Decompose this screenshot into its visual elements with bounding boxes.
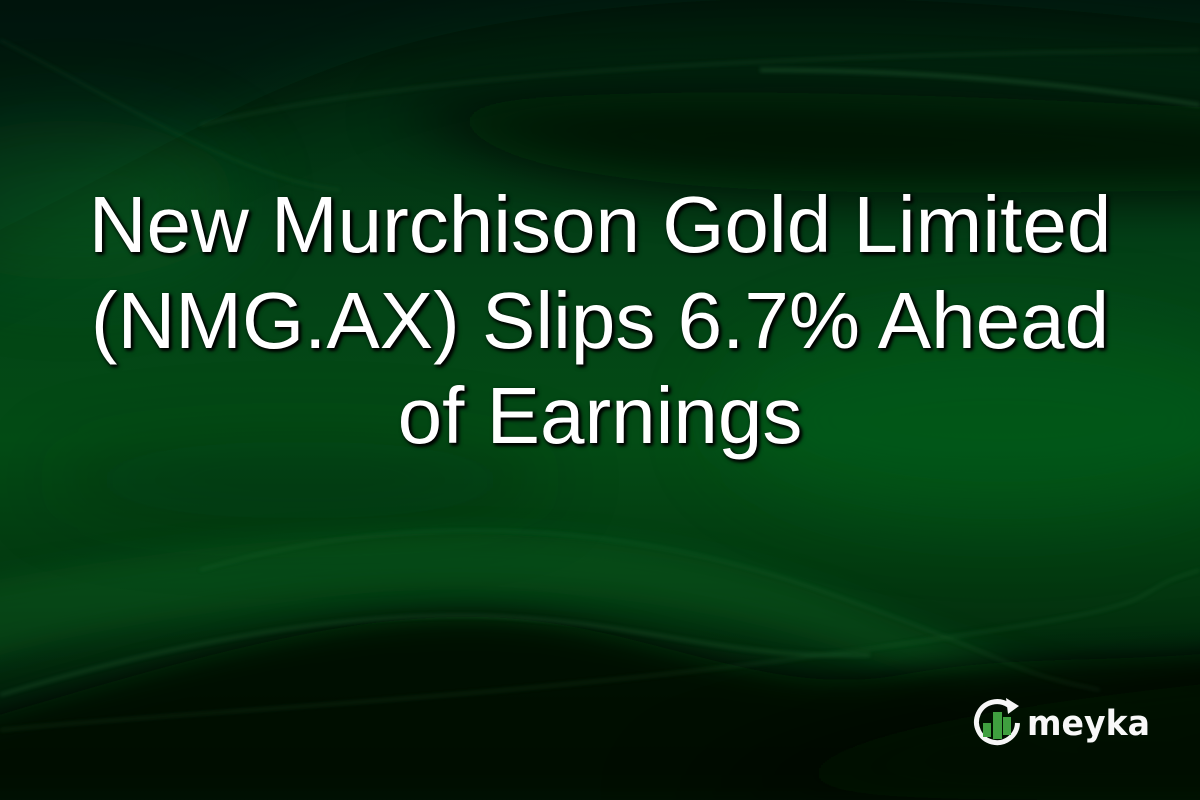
title: [89, 180, 1111, 464]
title: (NMG.AX) Slips 6.7% Ahead: [91, 276, 1109, 364]
title: of Earnings: [398, 371, 802, 460]
wordmark: meyka: [1027, 704, 1150, 744]
logo: meyka: [974, 698, 1150, 746]
icon: circular arrow with green bars: [977, 698, 1019, 743]
title: New Murchison Gold Limited: [89, 180, 1111, 269]
